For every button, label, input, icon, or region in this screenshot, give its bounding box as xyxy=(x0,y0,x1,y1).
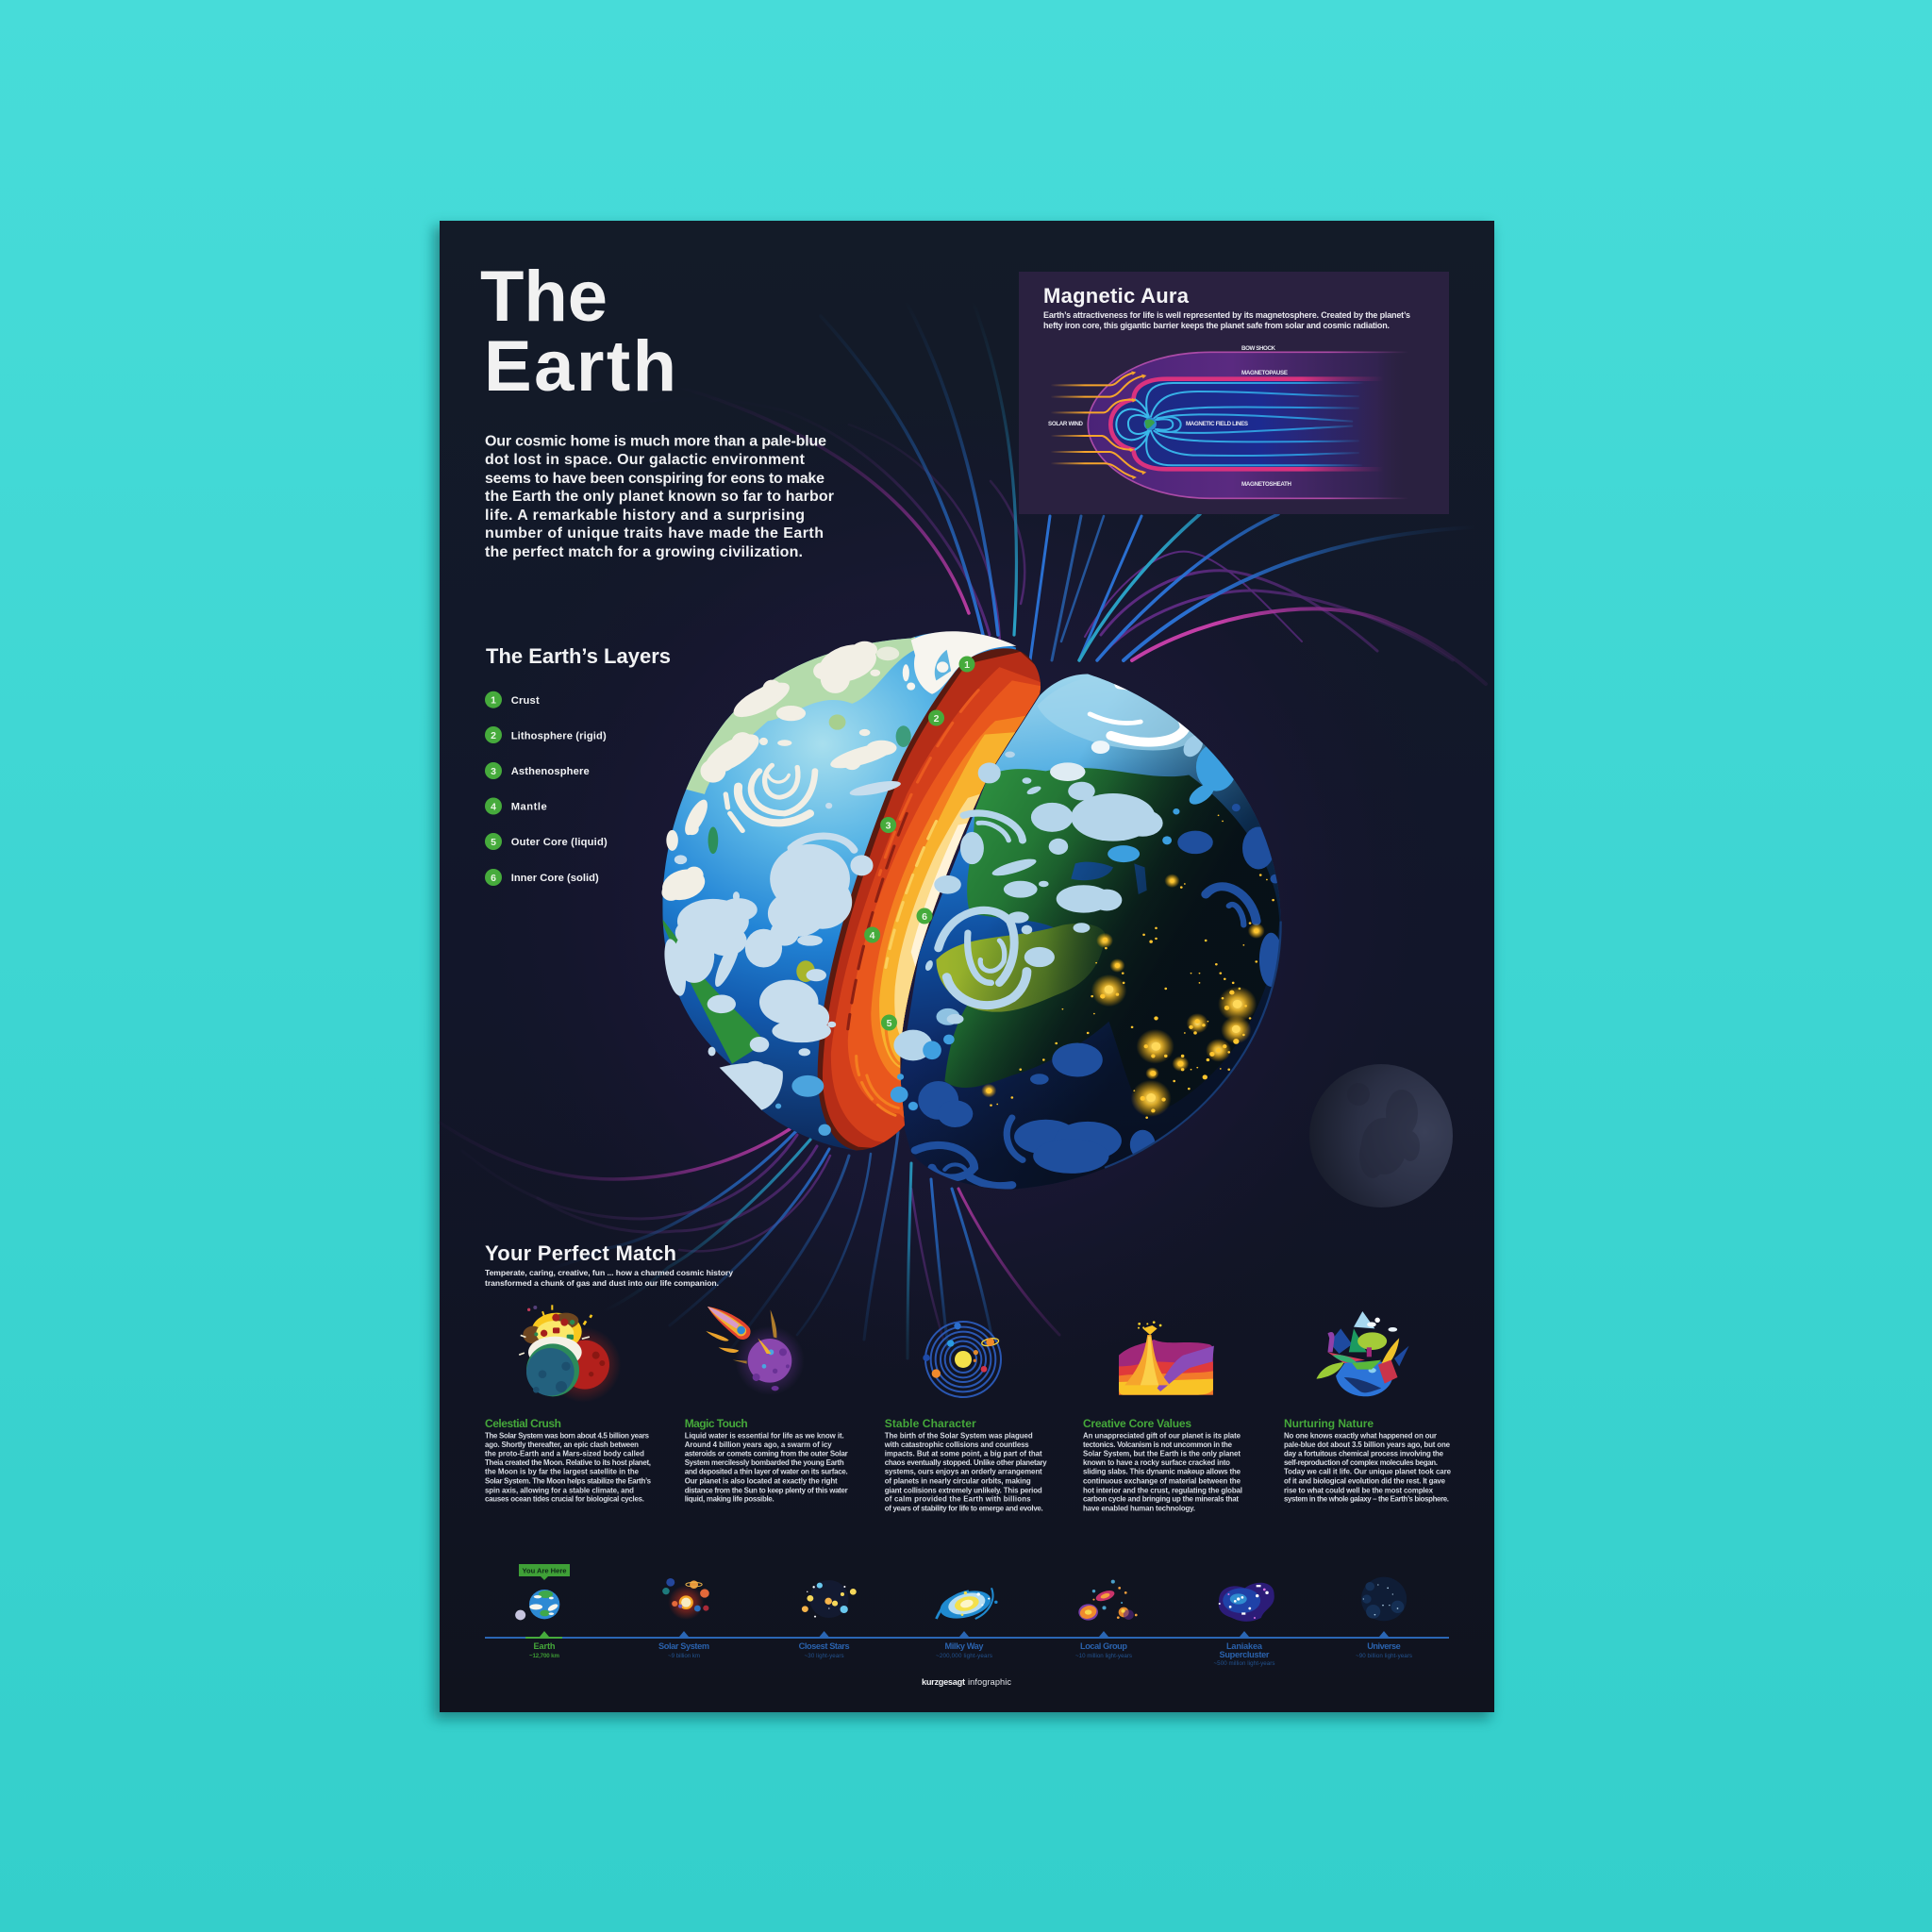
timeline label: Milky Way: ~200,000 light-years xyxy=(936,1653,992,1659)
text block: Creative Core Values: Creative Core Values xyxy=(1083,1417,1191,1430)
city lights xyxy=(981,814,1274,1119)
icon: Laniakea Supercluster scale xyxy=(1219,1583,1274,1622)
timeline label: Laniakea Supercluster: Supercluster xyxy=(1219,1650,1270,1659)
diagram labels: MAGNETOSHEATH xyxy=(1241,481,1292,488)
text block: Creative Core Values xyxy=(1083,1417,1242,1512)
text block: Magic Touch: liquid, making life possible. xyxy=(685,1495,774,1504)
diagram labels xyxy=(1048,345,1292,488)
panel description: Earth’s attractiveness for life is well represented by its magnetosphere. Created by the planet’s xyxy=(1043,310,1410,320)
text block: Magic Touch: distance from the Sun to keep plenty of this water xyxy=(685,1486,848,1494)
title xyxy=(480,257,676,407)
timeline label: Earth: Earth xyxy=(534,1641,556,1651)
icon: comets hitting purple planet xyxy=(706,1307,805,1395)
title: The xyxy=(480,257,608,337)
icon: stable solar system xyxy=(923,1322,1001,1397)
text block: Stable Character: of planets in nearly circular orbits, making xyxy=(885,1477,1031,1486)
text block: Magic Touch: Liquid water is essential for life as we know it. xyxy=(685,1431,844,1440)
text block: Creative Core Values: have enabled human technology. xyxy=(1083,1504,1195,1512)
footer credit xyxy=(922,1677,1011,1687)
legend items: 4 xyxy=(491,802,496,813)
heading: Magnetic Aura: Magnetic Aura xyxy=(1043,284,1190,308)
layer number markers on globe: 2 xyxy=(934,713,940,724)
layer number markers on globe xyxy=(864,657,975,1030)
diagram labels: MAGNETOPAUSE xyxy=(1241,370,1288,376)
timeline label: Earth: ~12,700 km xyxy=(529,1653,559,1659)
heading: layers: The Earth’s Layers xyxy=(486,644,671,668)
legend items: Mantle xyxy=(511,802,547,813)
cross-section of Earth's layers xyxy=(817,648,1041,1151)
intro paragraph: number of unique traits have made the Earth xyxy=(485,525,824,541)
text block: Creative Core Values: tectonics. Volcanism is not uncommon in the xyxy=(1083,1441,1233,1449)
text block: Stable Character: The birth of the Solar System was plagued xyxy=(885,1431,1033,1440)
text block: Magic Touch: asteroids or comets coming from the outer Solar xyxy=(685,1450,848,1458)
text block: Celestial Crush: The Solar System was born about 4.5 billion years xyxy=(485,1431,650,1440)
diagram labels: SOLAR WIND xyxy=(1048,421,1084,427)
timeline label: Laniakea Supercluster: Laniakea xyxy=(1226,1641,1263,1651)
text block: Stable Character: giant collisions extremely unlikely. This period xyxy=(885,1486,1042,1494)
text block: Magic Touch: and deposited a thin layer of water on its surface. xyxy=(685,1468,848,1476)
icon: Milky Way scale xyxy=(936,1586,998,1624)
intro paragraph: seems to have been conspiring for eons to make xyxy=(485,471,824,487)
footer credit: kurzgesagt xyxy=(922,1677,965,1687)
text block: Nurturing Nature: of it and biological evolution did the rest. It gave xyxy=(1284,1477,1446,1486)
text block: Magic Touch: Around 4 billion years ago, a swarm of icy xyxy=(685,1441,832,1449)
section subheading: Temperate, caring, creative, fun ... how a charmed cosmic history xyxy=(485,1268,733,1277)
legend items: 3 xyxy=(491,766,496,777)
text block: Stable Character: of calm provided the Earth with billions xyxy=(885,1495,1031,1504)
icon: Universe scale xyxy=(1361,1577,1407,1621)
intro paragraph: the Earth the only planet known so far to harbor xyxy=(485,489,834,505)
text block: Nurturing Nature: No one knows exactly what happened on our xyxy=(1284,1431,1437,1440)
timeline label: Laniakea Supercluster: ~500 million light-years xyxy=(1213,1660,1275,1667)
legend items: 1 xyxy=(491,695,496,707)
section subheading: transformed a chunk of gas and dust into our life companion. xyxy=(485,1278,719,1288)
footer credit: infographic xyxy=(968,1677,1011,1687)
scale timeline xyxy=(485,1631,1449,1639)
intro paragraph xyxy=(485,434,834,560)
title: Earth xyxy=(484,326,676,407)
swirl storm left xyxy=(725,765,815,831)
clouds: pale blue on right hemisphere xyxy=(893,752,1163,1060)
timeline label: Local Group xyxy=(1075,1641,1132,1659)
timeline label: Closest Stars: ~30 light-years xyxy=(805,1653,844,1659)
text block: Nurturing Nature: pale-blue dot about 3.5 billion years ago, but one xyxy=(1284,1441,1451,1449)
layer number markers on globe: 6 xyxy=(922,911,927,923)
text block: Stable Character: of years of stability for life to emerge and evolve. xyxy=(885,1504,1043,1512)
legend items: 5 xyxy=(491,837,496,848)
poster shadow xyxy=(434,226,1491,1719)
text block: Creative Core Values: continuous exchange of material between the xyxy=(1083,1477,1241,1486)
icon: planet collision xyxy=(519,1305,621,1403)
layer number markers on globe: 5 xyxy=(887,1018,892,1029)
timeline label: Solar System xyxy=(658,1641,709,1659)
timeline label: Local Group: Local Group xyxy=(1080,1641,1127,1651)
text block: Celestial Crush xyxy=(485,1417,652,1504)
text block: Celestial Crush: spin axis, allowing for a stable climate, and xyxy=(485,1486,634,1494)
text block: Celestial Crush: the proto-Earth and a Mars-sized body called xyxy=(485,1450,644,1458)
text block: Creative Core Values: Solar System, but the Earth is the only planet xyxy=(1083,1450,1241,1458)
diagram labels: BOW SHOCK xyxy=(1241,345,1276,352)
text block: Magic Touch: Magic Touch xyxy=(685,1417,748,1430)
layer number markers on globe: 4 xyxy=(870,930,875,941)
icon: Earth scale xyxy=(515,1590,559,1620)
timeline label: Closest Stars: Closest Stars xyxy=(799,1641,850,1651)
diagram labels: MAGNETIC FIELD LINES xyxy=(1186,421,1248,427)
icon: Closest Stars scale xyxy=(802,1580,857,1618)
text block: Nurturing Nature: Today we call it life. Our unique planet took care xyxy=(1284,1468,1452,1476)
text block: Creative Core Values: carbon cycle and bringing up the minerals that xyxy=(1083,1495,1239,1504)
legend items: Lithosphere (rigid) xyxy=(511,730,607,741)
text block: Creative Core Values: An unappreciated gift of our planet is its plate xyxy=(1083,1431,1241,1440)
icon: biosphere xyxy=(1316,1311,1409,1396)
timeline label: Universe: Universe xyxy=(1367,1641,1401,1651)
text block: Stable Character xyxy=(884,1417,1047,1512)
intro paragraph: Our cosmic home is much more than a pale-blue xyxy=(485,434,826,449)
intro paragraph: life. A remarkable history and a surprising xyxy=(485,508,805,524)
right hemisphere xyxy=(900,674,1281,1189)
text block: Celestial Crush: the Moon is by far the largest satellite in the xyxy=(485,1468,640,1476)
text block: Magic Touch: System mercilessly bombarded the young Earth xyxy=(685,1458,844,1467)
layer number markers on globe: 1 xyxy=(964,659,970,671)
text block: Stable Character: systems, ours enjoys an orderly arrangement xyxy=(885,1468,1042,1476)
poster xyxy=(440,221,1494,1712)
legend items: Asthenosphere xyxy=(511,766,590,777)
polar snow cap xyxy=(911,631,1016,694)
magnetic field lines xyxy=(440,274,1491,1358)
timeline label: Universe xyxy=(1356,1641,1412,1659)
text block: Nurturing Nature: day a fortuitous chemical process involving the xyxy=(1284,1450,1444,1458)
text block: Nurturing Nature: Nurturing Nature xyxy=(1284,1417,1374,1430)
main Earth globe xyxy=(654,625,1294,1198)
legend items: 2 xyxy=(491,730,496,741)
left hemisphere xyxy=(662,633,1017,1151)
legend items: Inner Core (solid) xyxy=(511,873,599,884)
text block: Stable Character: with catastrophic collisions and countless xyxy=(884,1441,1029,1449)
intro paragraph: the perfect match for a growing civilization. xyxy=(485,544,803,560)
timeline label: Closest Stars xyxy=(799,1641,850,1659)
legend items: Outer Core (liquid) xyxy=(511,837,608,848)
heading: Your Perfect Match: Your Perfect Match xyxy=(485,1241,676,1265)
clouds: pale blue lower left xyxy=(660,778,902,1110)
legend items xyxy=(485,691,608,886)
text block: Celestial Crush: causes ocean tides crucial for biological cycles. xyxy=(485,1495,644,1504)
text block: Nurturing Nature: rise to what could well be the most complex xyxy=(1284,1486,1434,1494)
timeline label: Milky Way: Milky Way xyxy=(945,1641,984,1651)
icon: plate tectonics block xyxy=(1119,1321,1214,1395)
timeline label: Local Group: ~10 million light-years xyxy=(1075,1653,1132,1659)
text block: Creative Core Values: sliding slabs. This dynamic makeup allows the xyxy=(1083,1468,1241,1476)
text block: Magic Touch xyxy=(685,1417,848,1504)
moon xyxy=(1309,1064,1453,1208)
text block: Stable Character: chaos eventually stopped. Unlike other planetary xyxy=(885,1458,1047,1467)
text block: Stable Character: Stable Character xyxy=(885,1417,976,1430)
text block: Celestial Crush: Theia created the Moon. Relative to its host planet, xyxy=(485,1458,651,1467)
layer number markers on globe: 3 xyxy=(886,821,891,832)
text block: Nurturing Nature xyxy=(1284,1417,1452,1504)
legend items: 6 xyxy=(491,873,496,884)
section subheading xyxy=(485,1268,733,1288)
timeline label: Solar System: ~9 billion km xyxy=(668,1653,700,1659)
intro paragraph: dot lost in space. Our galactic environment xyxy=(485,452,806,468)
timeline label: Earth xyxy=(529,1641,559,1659)
magnetosphere diagram xyxy=(1052,352,1408,498)
timeline label: Laniakea Supercluster xyxy=(1213,1641,1275,1667)
text block: Stable Character: impacts. But at some point, a big part of that xyxy=(885,1450,1042,1458)
text block: Nurturing Nature: system in the whole galaxy – the Earth’s biosphere. xyxy=(1284,1495,1449,1504)
callout: You Are Here: You Are Here xyxy=(523,1566,566,1575)
polar snow swirl xyxy=(1090,685,1185,742)
panel description xyxy=(1043,310,1410,330)
timeline label: Milky Way xyxy=(936,1641,992,1659)
text block: Magic Touch: Our planet is also located at exactly the right xyxy=(685,1477,838,1486)
icon: Solar System scale xyxy=(662,1578,709,1620)
icon: Local Group scale xyxy=(1078,1580,1138,1621)
panel description: hefty iron core, this gigantic barrier keeps the planet safe from solar and cosmic radiation. xyxy=(1043,321,1390,330)
clouds: cream upper left xyxy=(658,638,899,906)
legend items: Crust xyxy=(511,695,540,707)
timeline label: Solar System: Solar System xyxy=(658,1641,709,1651)
timeline label: Universe: ~90 billion light-years xyxy=(1356,1653,1412,1659)
text block: Celestial Crush: Solar System. The Moon helps stabilize the Earth’s xyxy=(485,1477,652,1486)
text block: Creative Core Values: known to have a rocky surface cracked into xyxy=(1083,1458,1230,1467)
text block: Celestial Crush: ago. Shortly thereafter, an epic clash between xyxy=(485,1441,639,1449)
text block: Nurturing Nature: self-reproduction of complex molecules began. xyxy=(1284,1458,1438,1467)
panel: Earth's layers legend xyxy=(485,644,671,886)
text block: Creative Core Values: hot interior and the crust, regulating the global xyxy=(1083,1486,1242,1494)
panel: Magnetic Aura xyxy=(1019,272,1449,514)
callout: You Are Here xyxy=(519,1564,570,1580)
text block: Celestial Crush: Celestial Crush xyxy=(485,1417,561,1430)
